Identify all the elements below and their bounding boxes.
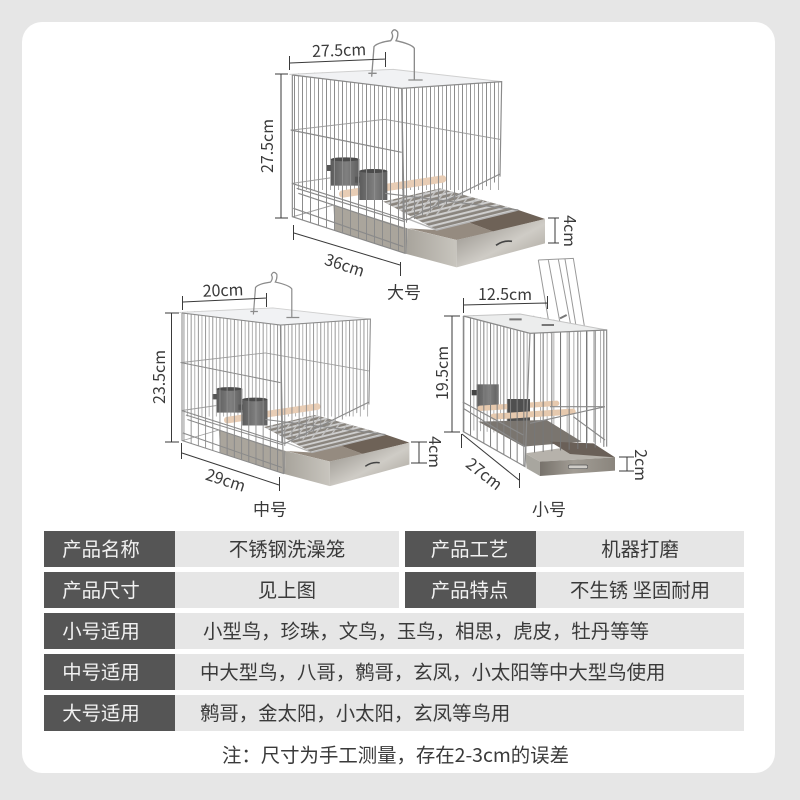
footnote: 注：尺寸为手工测量，存在2-3cm的误差 [222, 739, 569, 768]
back wires [292, 70, 500, 217]
large cage [289, 30, 545, 267]
label: 产品特点: 产品特点 [431, 574, 508, 603]
value: product name [175, 531, 399, 567]
floor grate [383, 188, 518, 230]
right face wires small [525, 330, 607, 453]
caption: small: 小号 [532, 496, 566, 520]
left face wires [292, 75, 405, 253]
dimension text: small length: 27cm [462, 451, 508, 495]
dimension lines: medium [165, 293, 427, 491]
label: 大号适用: 大号适用 [62, 697, 140, 726]
value: product name: 不锈钢洗澡笼 [229, 533, 345, 562]
value: features [536, 572, 744, 608]
left face wires small [463, 316, 530, 467]
back wires small [468, 315, 607, 443]
value: process [536, 531, 744, 567]
dimension text: large height: 27.5cm [254, 119, 278, 173]
label: 产品特点 [405, 572, 536, 608]
tray interior small [478, 420, 582, 447]
wooden perch [343, 179, 443, 194]
value: medium suitable birds [175, 654, 744, 690]
caption: medium: 中号 [253, 496, 287, 520]
value: small suitable birds: 小型鸟，珍珠，文鸟，玉鸟，相思，虎皮，牡丹等等 [203, 615, 649, 644]
label: 中号适用: 中号适用 [62, 656, 140, 685]
label: 大号适用 [44, 695, 175, 731]
value: large suitable birds: 鹩哥，金太阳，小太阳，玄凤等鸟用 [200, 697, 510, 726]
value: size: 见上图 [258, 574, 316, 603]
frame rails small [463, 316, 607, 467]
cup rear small [472, 384, 499, 407]
dimension text: medium height: 23.5cm [146, 350, 170, 404]
right face wires [402, 82, 502, 223]
caption: large: 大号 [387, 278, 421, 304]
fold-up handle [538, 258, 585, 333]
dimension text: large length: 36cm [322, 246, 368, 282]
drawer [407, 210, 545, 267]
carry handle [368, 30, 423, 80]
value: medium suitable birds: 中大型鸟，八哥，鹩哥，玄凤，小太阳等中大型鸟使用 [200, 656, 665, 685]
value: small suitable birds [175, 613, 744, 649]
dimension text: medium drawer: 4cm [424, 436, 448, 468]
label: 小号适用 [44, 613, 175, 649]
water cup rear [326, 157, 359, 186]
dimension text: small width: 12.5cm [478, 281, 532, 305]
label: 产品名称: 产品名称 [62, 533, 140, 562]
dimension text: large width: 27.5cm [312, 36, 366, 62]
dimension text: medium width: 20cm [202, 276, 244, 302]
perch rear small [480, 403, 557, 408]
tray dark slots [333, 205, 407, 254]
dimension lines: small [444, 296, 634, 488]
dimension text: medium length: 29cm [203, 461, 249, 497]
label: 中号适用 [44, 654, 175, 690]
dimension text: large drawer: 4cm [559, 215, 583, 247]
roof [289, 69, 502, 89]
roof small [463, 314, 607, 333]
value: features: 不生锈 坚固耐用 [570, 574, 710, 603]
label: 产品工艺: 产品工艺 [431, 533, 508, 562]
label: 小号适用: 小号适用 [62, 615, 140, 644]
roof fittings [509, 315, 567, 325]
water cup front [355, 169, 387, 200]
dimension text: small drawer: 2cm [630, 449, 654, 481]
perch front small [493, 412, 573, 417]
dimension lines: large [275, 52, 559, 276]
tray under cage [333, 205, 407, 254]
drawer small [525, 442, 615, 476]
dimension text: small height: 19.5cm [429, 346, 453, 400]
label: 产品工艺 [405, 531, 536, 567]
small cage [463, 258, 615, 476]
label: 产品尺寸 [44, 572, 175, 608]
label: 产品名称 [44, 531, 175, 567]
label: 产品尺寸: 产品尺寸 [62, 574, 140, 603]
product illustrations with dimensions [146, 29, 654, 520]
cup front small [507, 399, 530, 422]
medium cage [179, 272, 409, 486]
value: large suitable birds [175, 695, 744, 731]
value: size [175, 572, 399, 608]
value: process: 机器打磨 [601, 533, 679, 562]
cage frame rails [291, 75, 518, 253]
